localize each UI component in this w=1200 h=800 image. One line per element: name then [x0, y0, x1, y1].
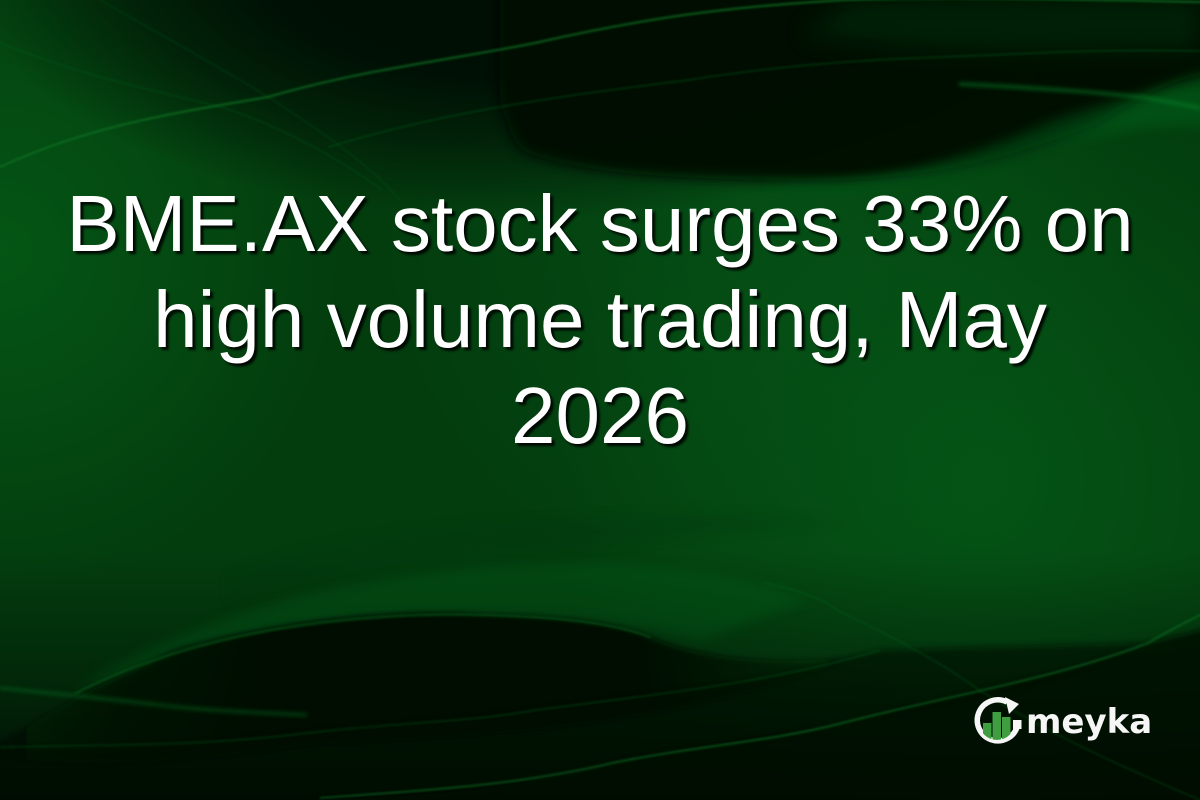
title: BME.AX stock surges 33% on	[66, 179, 1134, 268]
top right lift	[800, 0, 1200, 51]
top dark lens	[500, 0, 1200, 181]
bottom green ribbon glow	[70, 564, 810, 690]
logo: meyka	[974, 697, 1152, 744]
icon: circular arrow with green bars	[974, 697, 1022, 744]
lower dark hill	[0, 613, 880, 762]
bottom dark band	[0, 643, 1148, 800]
title: high volume trading, May	[153, 275, 1047, 364]
title: 2026	[511, 371, 689, 460]
logo wordmark: meyka	[1026, 702, 1152, 742]
upper soft dark band	[230, 515, 842, 600]
ribbon under lens	[760, 84, 1200, 190]
bottom curves	[321, 615, 1200, 798]
title	[66, 179, 1134, 460]
top dark mass	[0, 0, 1080, 220]
bottom general darkening	[0, 550, 1200, 800]
lower right dark	[321, 620, 1200, 800]
top curves	[0, 0, 1200, 167]
